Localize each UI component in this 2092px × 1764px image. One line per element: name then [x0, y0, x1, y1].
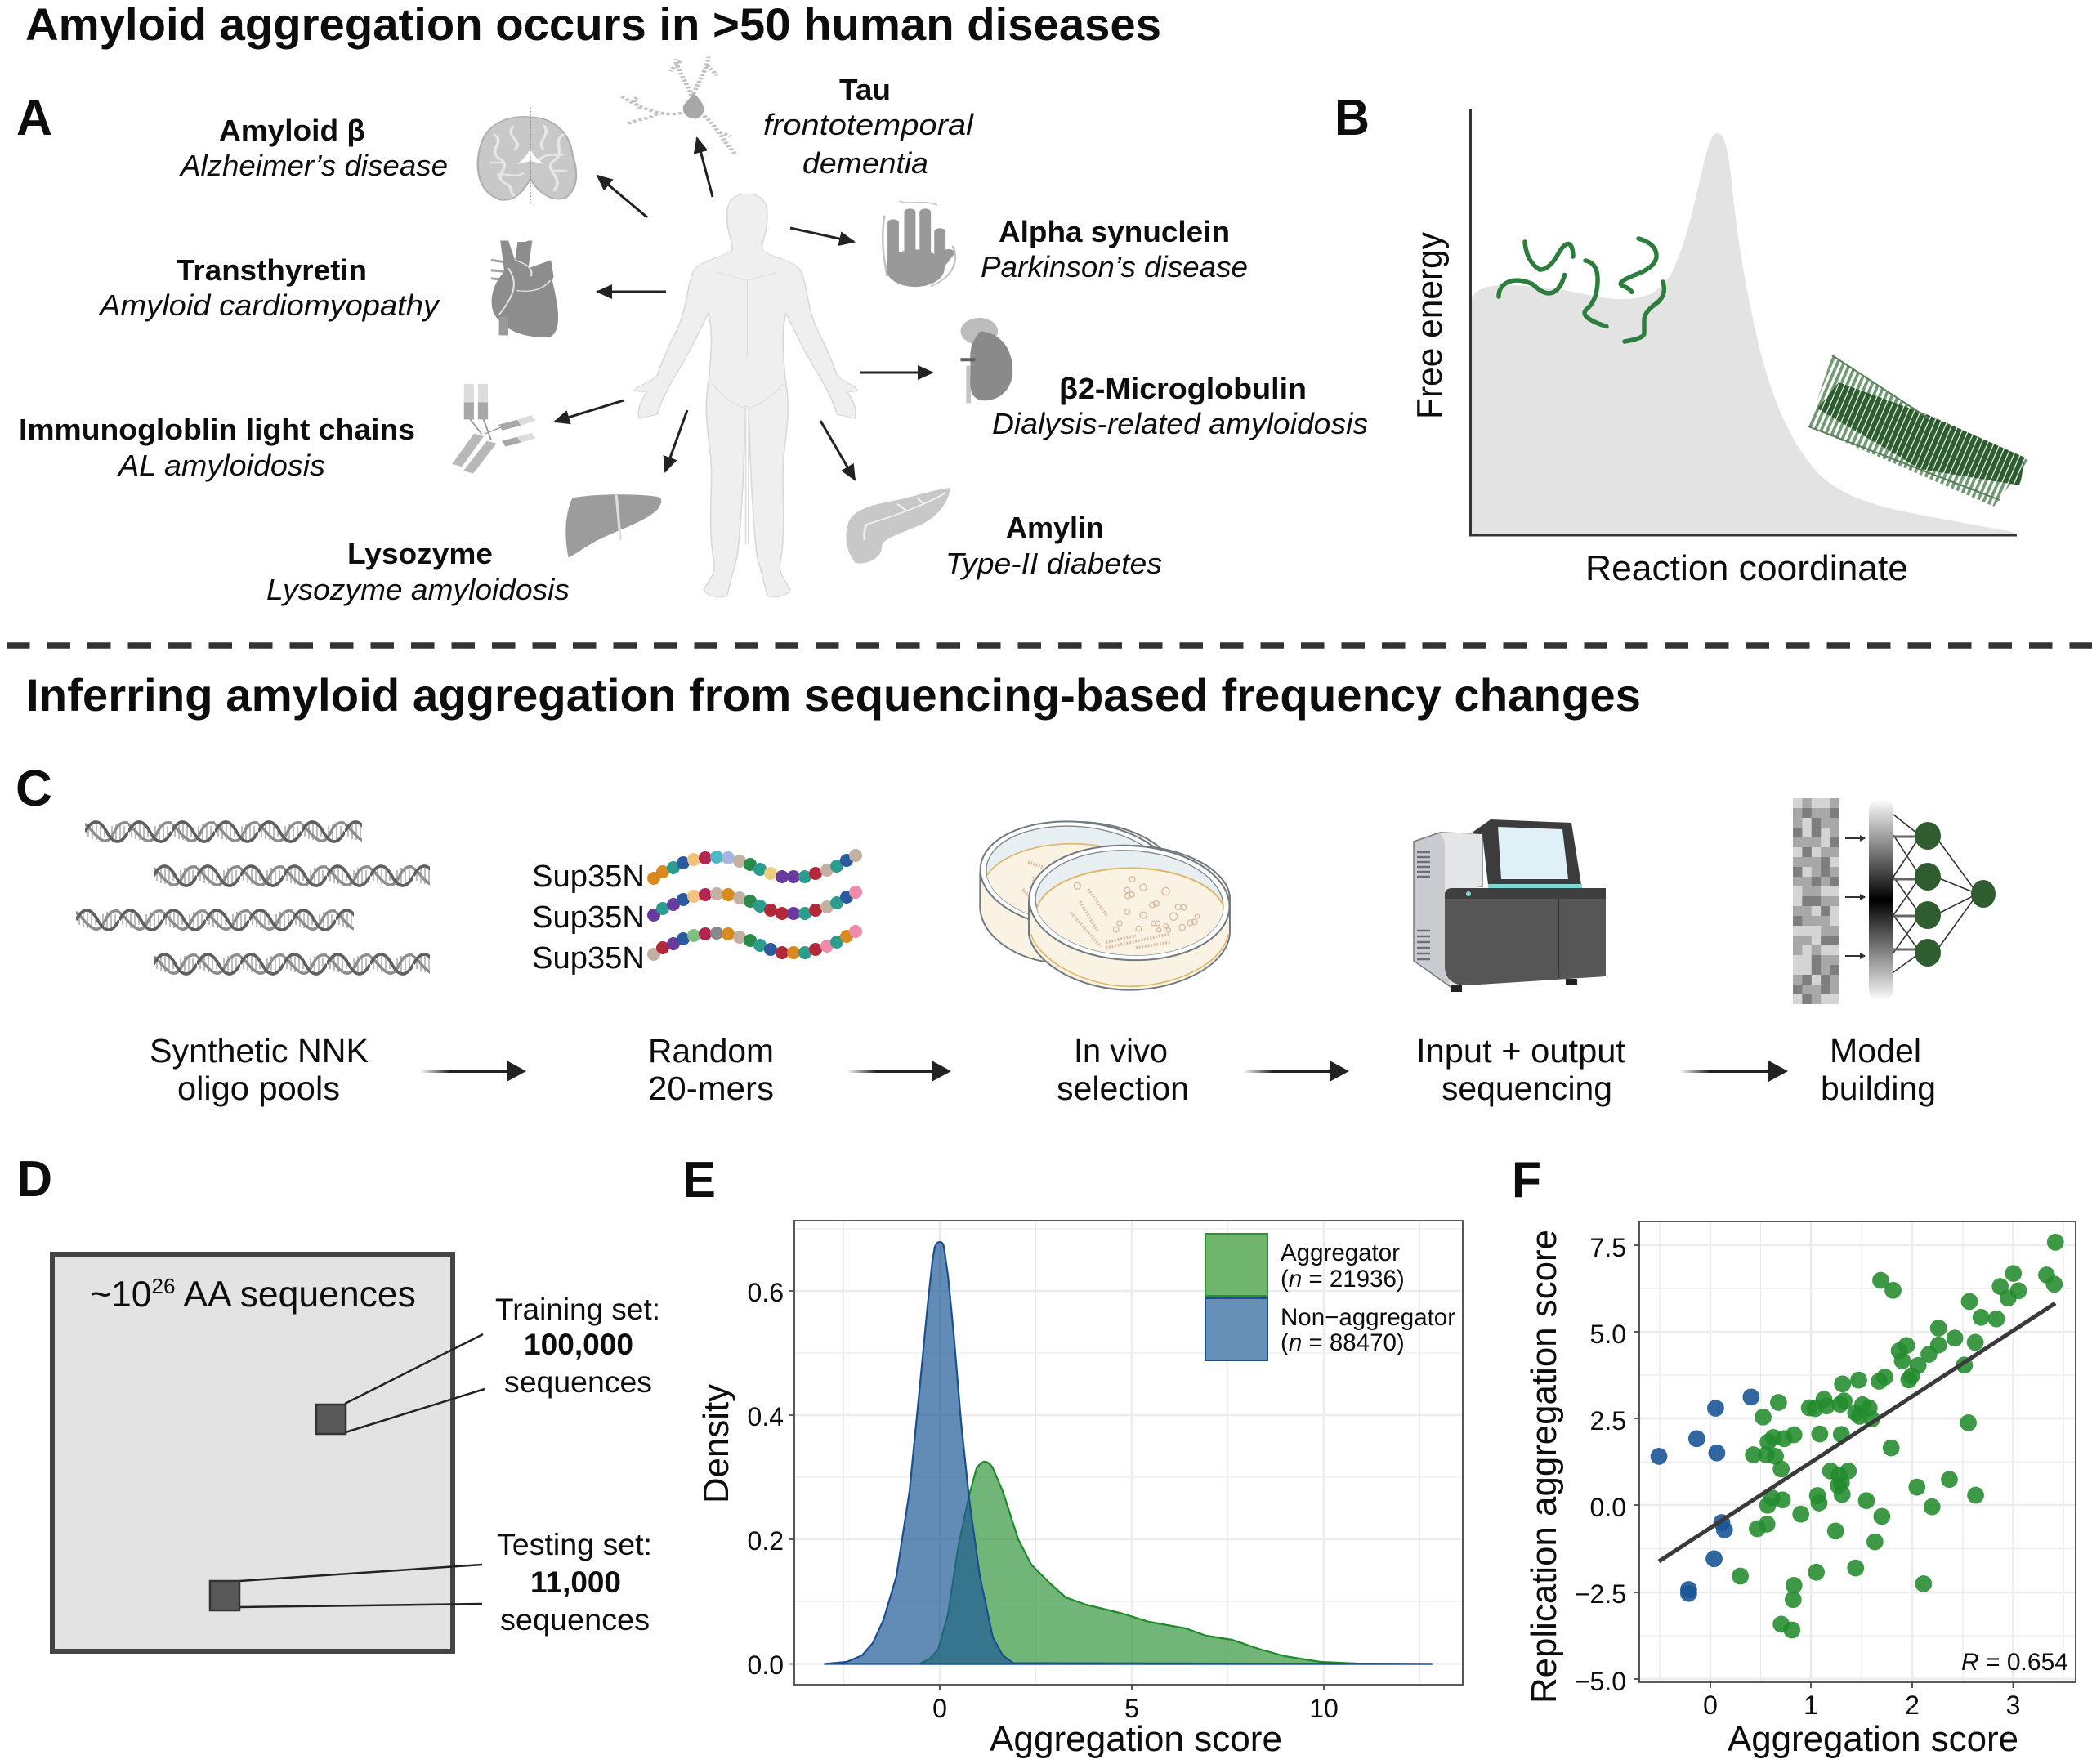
- panel E: density plot: [682, 1152, 1463, 1759]
- step labels: Model: [1830, 1032, 1921, 1070]
- step labels: Input + output: [1416, 1032, 1626, 1070]
- y tick labels: −2.5: [1575, 1579, 1626, 1609]
- y axis label: Replication aggregation score: [1524, 1230, 1564, 1704]
- panel letter A: A: [16, 90, 52, 146]
- icon: neuron: [622, 57, 735, 154]
- label: sequence space size: 26: [152, 1274, 175, 1298]
- y axis label: Density: [696, 1384, 736, 1503]
- scatter: aggregators: [1732, 1234, 2064, 1638]
- Sup35N labels: Sup35N: [532, 860, 645, 894]
- panel C: workflow: [16, 761, 1996, 1107]
- label: testing set: [497, 1528, 652, 1637]
- panel letter E: E: [682, 1152, 716, 1208]
- grid: [794, 1221, 1463, 1685]
- x tick labels: 10: [1309, 1694, 1339, 1723]
- label: alpha synuclein: Alpha synuclein: [999, 215, 1230, 248]
- x tick labels: [1703, 1690, 2020, 1720]
- step labels: sequencing: [1442, 1070, 1612, 1107]
- legend: [1205, 1234, 1455, 1360]
- x tick labels: [932, 1694, 1339, 1723]
- label: amyloid beta: Amyloid β: [219, 114, 365, 147]
- label: amylin: Type-II diabetes: [945, 547, 1162, 580]
- step labels: selection: [1057, 1070, 1189, 1107]
- label: alpha synuclein: Parkinson’s disease: [981, 250, 1248, 284]
- icon: human body: [633, 194, 857, 597]
- axis tick labels: [748, 1278, 784, 1680]
- label: sequence space size: AA sequences: [175, 1275, 416, 1315]
- panel letter F: F: [1512, 1152, 1541, 1208]
- label: lysozyme: Lysozyme: [347, 537, 493, 570]
- training subset square and leader lines: [316, 1334, 485, 1434]
- network nodes: [1915, 822, 1996, 967]
- panel letter C: C: [16, 761, 52, 817]
- energy curve area: [1472, 133, 2017, 535]
- label: tau: Tau: [839, 73, 891, 106]
- title: inferring amyloid aggregation: Inferring amyloid aggregation from sequencing-based frequency changes: [26, 669, 1641, 721]
- arrows from body to organs: [555, 138, 932, 480]
- label: tau: [763, 73, 974, 180]
- label: training set: Training set:: [495, 1293, 660, 1326]
- x axis label: Aggregation score: [990, 1719, 1282, 1759]
- label: testing set: Testing set:: [497, 1528, 652, 1561]
- Sup35N labels: Sup35N: [532, 900, 645, 935]
- y tick labels: 5.0: [1590, 1320, 1626, 1349]
- legend: Aggregator: [1281, 1239, 1400, 1266]
- step labels: In vivo: [1074, 1032, 1168, 1070]
- label: testing set: 11,000: [530, 1565, 621, 1599]
- label: training set: 100,000: [524, 1328, 633, 1361]
- panel A: diseases and organs: [16, 57, 1368, 606]
- label: amylin: [945, 511, 1162, 580]
- y tick labels: −5.0: [1575, 1667, 1626, 1696]
- x tick labels: 0: [1703, 1690, 1718, 1720]
- panel letter D: D: [17, 1151, 52, 1208]
- fibril: [1808, 355, 2028, 507]
- label: testing set: sequences: [500, 1603, 650, 1637]
- x axis label: Aggregation score: [1728, 1719, 2018, 1759]
- monomer chains: [1499, 239, 1664, 342]
- label: amyloid beta: Alzheimer’s disease: [179, 149, 448, 182]
- step labels: [150, 1032, 1936, 1107]
- icon: heart: [491, 240, 558, 337]
- label: lysozyme: Lysozyme amyloidosis: [266, 573, 570, 606]
- icon: brain: [478, 108, 576, 205]
- Sup35N labels: Sup35N: [532, 941, 645, 976]
- label: alpha synuclein: [981, 215, 1248, 284]
- icon: DNA oligo strands: [76, 819, 430, 976]
- arrows between steps: [420, 1061, 1788, 1082]
- panel F: replication scatter: [1512, 1152, 2076, 1759]
- label: training set: [495, 1293, 660, 1399]
- label: training set: sequences: [504, 1365, 652, 1399]
- icon: neural network model: [1793, 798, 1996, 1004]
- icon: hand tremor: [883, 201, 955, 287]
- icon: antibody: [457, 384, 534, 472]
- label: beta2 microglobulin: Dialysis-related amyloidosis: [992, 407, 1368, 440]
- axes: [1471, 109, 2017, 535]
- plot frame and ticks: [1634, 1221, 2076, 1688]
- step labels: Synthetic NNK: [150, 1032, 369, 1070]
- testing subset square and leader lines: [210, 1565, 482, 1610]
- plot frame and ticks: [789, 1221, 1463, 1690]
- x tick labels: 2: [1905, 1690, 1920, 1720]
- label: beta2 microglobulin: β2-Microglobulin: [1059, 372, 1307, 405]
- section divider: [7, 642, 2092, 649]
- input heatmap: [1793, 798, 1839, 1004]
- label: transthyretin: Transthyretin: [177, 253, 367, 287]
- regression line: [1659, 1303, 2055, 1561]
- correlation annotation: R = 0.654: [1961, 1649, 2068, 1676]
- label: immunoglobulin light chains: AL amyloidosis: [117, 449, 325, 482]
- density: aggregator: [919, 1462, 1432, 1664]
- y tick labels: 0.0: [1590, 1493, 1626, 1522]
- label: immunoglobulin light chains: Immunogloblin light chains: [19, 413, 415, 446]
- icon: petri dishes: [976, 814, 1232, 990]
- icon: sequencer: [1414, 819, 1606, 992]
- axis tick labels: 0.0: [748, 1650, 784, 1680]
- gradient layer: [1869, 798, 1893, 1002]
- peptide bead chains: [647, 849, 862, 961]
- x tick labels: 3: [2006, 1690, 2020, 1720]
- label: amyloid beta: [179, 114, 448, 182]
- axis tick labels: 0.4: [748, 1402, 784, 1431]
- label: immunoglobulin light chains: [19, 413, 415, 482]
- density: non-aggregator: [825, 1242, 1432, 1664]
- label: tau: dementia: [802, 146, 928, 180]
- x tick labels: 1: [1804, 1690, 1818, 1720]
- label: sequence space size: ~10: [90, 1275, 152, 1315]
- label: amylin: Amylin: [1006, 511, 1104, 544]
- step labels: oligo pools: [177, 1070, 340, 1107]
- label: transthyretin: Amyloid cardiomyopathy: [98, 288, 440, 322]
- grid: [1639, 1221, 2076, 1682]
- icon: kidney: [960, 318, 1012, 403]
- icon: pancreas: [846, 488, 950, 564]
- label: tau: frontotemporal: [763, 108, 974, 141]
- network edges: [1893, 815, 1978, 972]
- label: transthyretin: [98, 253, 440, 322]
- step labels: building: [1821, 1070, 1936, 1107]
- legend: Non−aggregator: [1281, 1304, 1455, 1331]
- step labels: 20-mers: [648, 1070, 774, 1107]
- axis tick labels: 0.6: [748, 1278, 784, 1307]
- axis tick labels: 0.2: [748, 1526, 784, 1556]
- label: lysozyme: [266, 537, 570, 606]
- x tick labels: 5: [1124, 1694, 1139, 1723]
- label: beta2 microglobulin: [992, 372, 1368, 440]
- y axis label: Free energy: [1410, 232, 1450, 419]
- icon: liver: [565, 494, 661, 557]
- Sup35N labels: [532, 860, 645, 976]
- panel B: free energy landscape: [1334, 90, 2028, 588]
- panel D: sequence space: [17, 1151, 660, 1651]
- legend: (n = 21936): [1281, 1266, 1405, 1293]
- step labels: Random: [648, 1032, 774, 1070]
- x axis label: Reaction coordinate: [1585, 548, 1908, 588]
- sequence space box: [52, 1254, 453, 1651]
- small arrows: [1845, 838, 1865, 956]
- y tick labels: [1575, 1233, 1626, 1696]
- scatter: non-aggregators: [1651, 1388, 1759, 1602]
- y tick labels: 2.5: [1590, 1406, 1626, 1436]
- legend: (n = 88470): [1281, 1329, 1405, 1356]
- y tick labels: 7.5: [1590, 1233, 1626, 1262]
- panel letter B: B: [1334, 90, 1370, 146]
- x tick labels: 0: [932, 1694, 947, 1723]
